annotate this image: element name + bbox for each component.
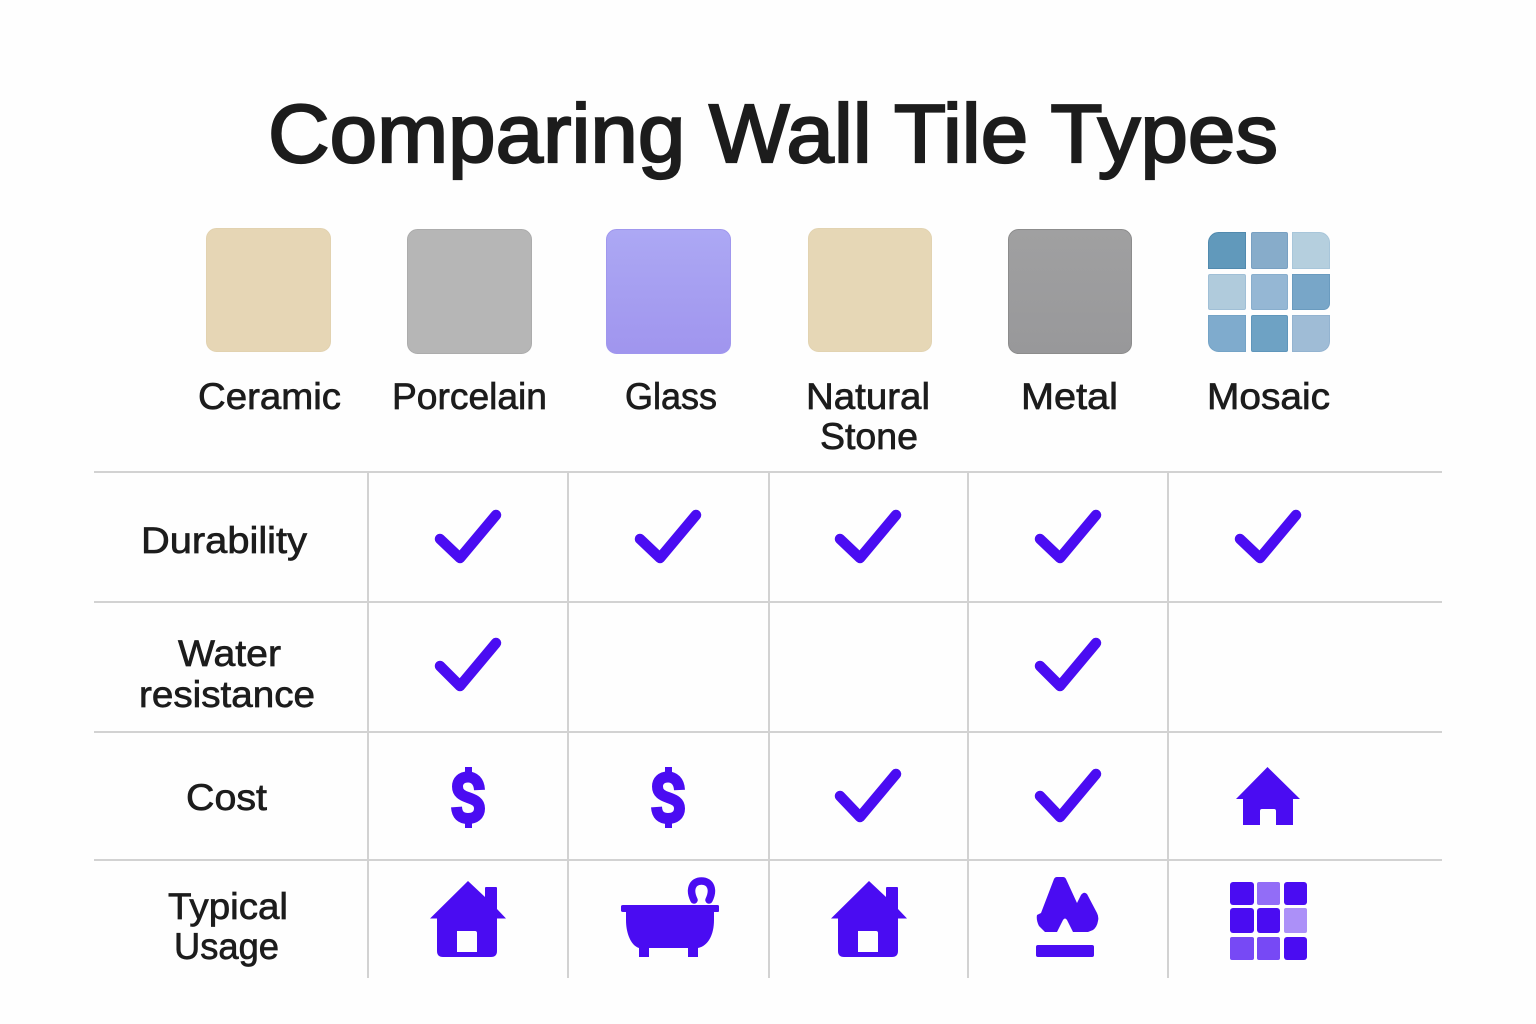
column: Porcelain: [392, 230, 547, 417]
icon: flame, Metal usage: [1036, 877, 1098, 957]
icon: dollar, Glass cost: [656, 767, 680, 828]
label: Glass: Glass: [625, 376, 717, 417]
swatch: porcelain: [408, 230, 532, 354]
row label: Typical Usage: Typical: [168, 886, 288, 927]
swatch: glass: [606, 230, 730, 354]
column: Mosaic: [1207, 232, 1330, 417]
label: Ceramic: Ceramic: [198, 376, 341, 417]
column: Glass: [606, 230, 730, 417]
icon: house, Mosaic cost: [1236, 767, 1300, 825]
icon: check, Natural Stone cost: [840, 774, 896, 817]
icon: bathtub, Glass usage: [621, 881, 719, 957]
swatch: mosaic: [1208, 232, 1330, 352]
swatch: ceramic: [206, 228, 330, 352]
title: Comparing Wall Tile Types: [268, 87, 1278, 180]
row label: Water resistance: Water: [178, 633, 281, 674]
row: Cost: [186, 767, 1300, 828]
icon: check, Metal cost: [1040, 774, 1096, 817]
icon: house with chimney, Natural Stone usage: [831, 881, 907, 957]
row: Typical Usage: [168, 877, 1307, 967]
label: Natural Stone: Stone: [820, 416, 918, 457]
row label: Cost: Cost: [186, 777, 268, 818]
icon: check, Metal durability: [1040, 515, 1096, 558]
row label: Water resistance: [139, 633, 315, 715]
label: Natural Stone: Natural: [806, 376, 930, 417]
column: Metal: [1008, 230, 1132, 417]
row label: Durability: Durability: [141, 520, 308, 561]
label: Mosaic: Mosaic: [1207, 376, 1330, 417]
column: Natural Stone: [806, 228, 932, 457]
icon: dollar, Porcelain cost: [456, 767, 480, 828]
icon: house with chimney, Porcelain usage: [430, 881, 506, 957]
icon: check, Natural Stone durability: [840, 515, 896, 558]
swatch: metal: [1008, 230, 1132, 354]
label: Natural Stone: [806, 376, 930, 457]
icon: check, Porcelain durability: [440, 515, 496, 558]
row label: Water resistance: resistance: [139, 674, 315, 715]
row label: Typical Usage: Usage: [174, 926, 279, 967]
row: Water resistance: [139, 633, 1096, 715]
icon: check, Glass durability: [640, 515, 696, 558]
swatch: natural stone: [808, 228, 932, 352]
icon: tile grid, Mosaic usage: [1230, 882, 1307, 960]
icon: check, Porcelain water resistance: [440, 643, 496, 686]
icon: check, Mosaic durability: [1240, 515, 1296, 558]
label: Porcelain: Porcelain: [392, 376, 547, 417]
row: Durability: [141, 515, 1296, 561]
icon: check, Metal water resistance: [1040, 643, 1096, 686]
row label: Typical Usage: [168, 886, 288, 967]
label: Metal: Metal: [1021, 376, 1118, 417]
column: Ceramic: [198, 228, 341, 417]
